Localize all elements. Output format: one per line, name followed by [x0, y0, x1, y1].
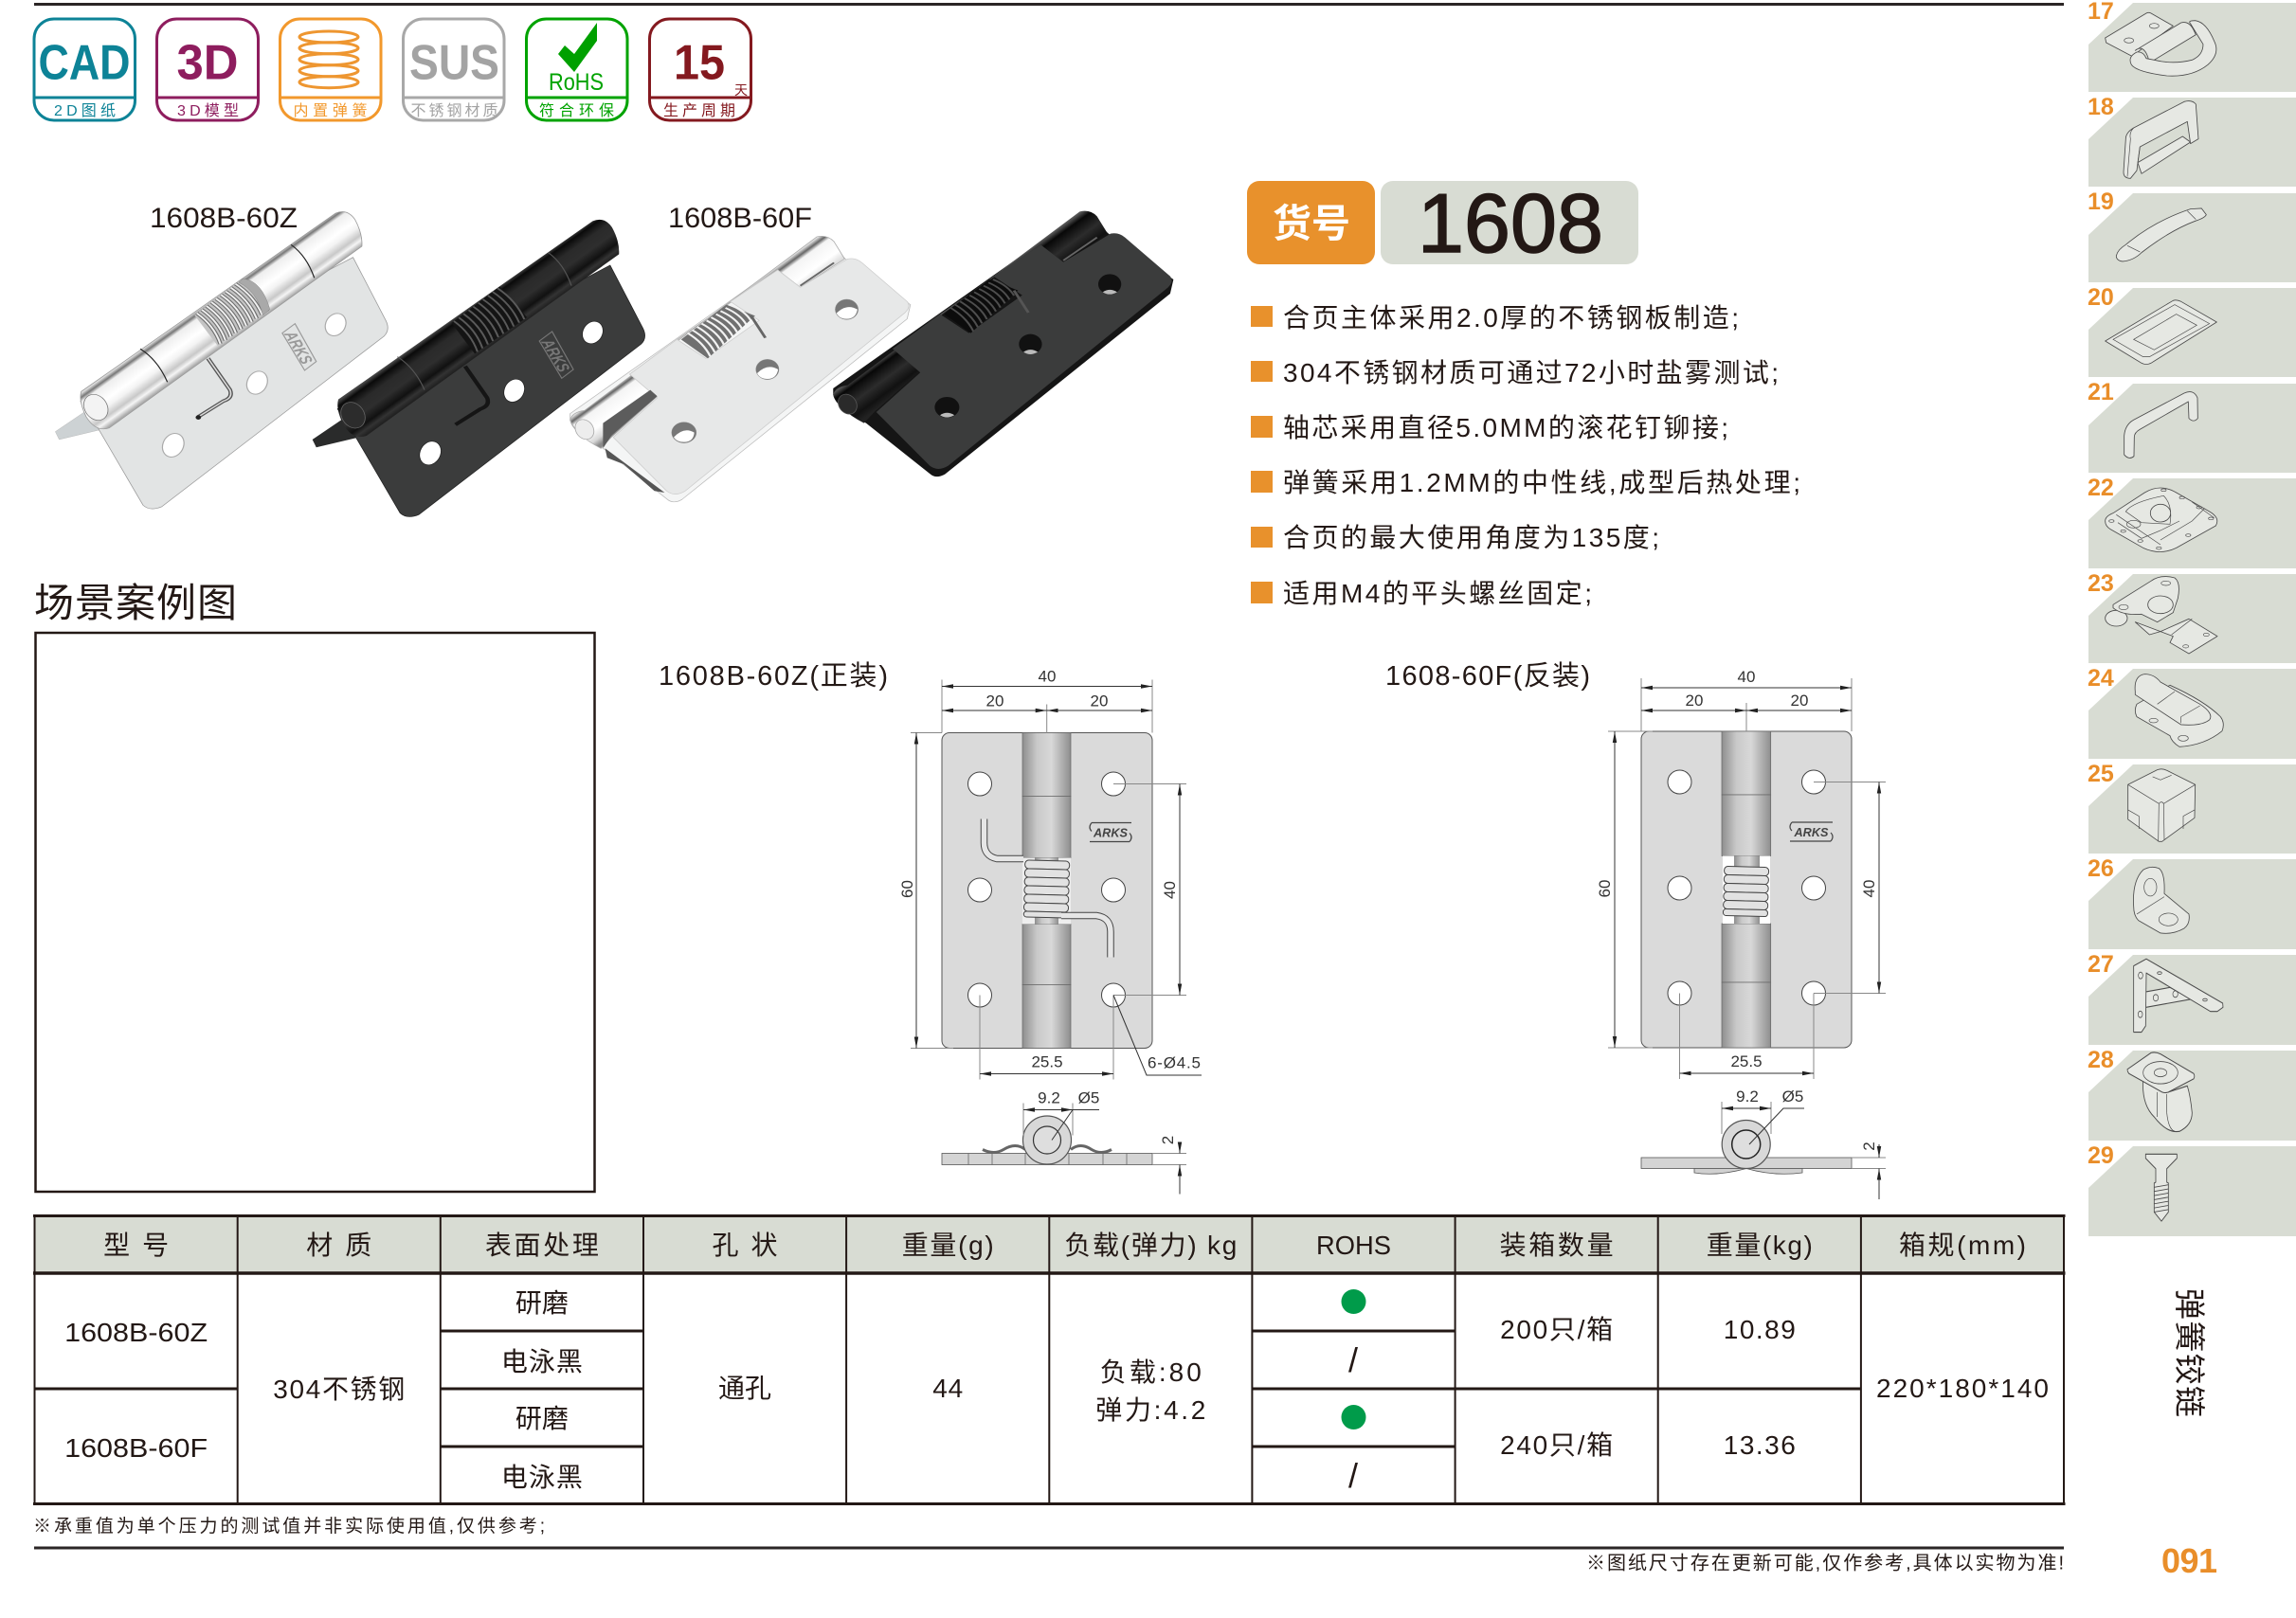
table header text: 型 号 — [103, 1231, 169, 1260]
table header text: 孔 状 — [713, 1231, 777, 1260]
feature 2: 304不锈钢材质可通过72小时盐雾测试; — [1283, 358, 1779, 387]
table body text: 电泳黑 — [501, 1463, 583, 1492]
table header text: 负载(弹力) kg — [1064, 1231, 1237, 1260]
badge: CAD: CAD — [38, 36, 131, 91]
table header text: 箱规(mm) — [1899, 1231, 2026, 1260]
product number tag: value: 1608 — [1418, 176, 1603, 270]
sidebar numbers: 28 — [2088, 1047, 2114, 1073]
table body text: 200只/箱 — [1500, 1315, 1613, 1344]
badge: 15 days — [650, 19, 750, 120]
table header text: 重量(kg) — [1707, 1231, 1813, 1260]
dimensions front view: 60 — [898, 880, 916, 898]
specification table — [33, 1214, 2066, 1505]
top rule — [34, 3, 2064, 6]
dimensions front view: 40 — [1039, 667, 1056, 686]
side view: Ø5 — [1782, 1088, 1803, 1106]
category label rotated: 弹簧铰链 — [2172, 1288, 2207, 1417]
product photo: silver hinge back — [570, 236, 911, 502]
dimensions front view: 25.5 — [1730, 1052, 1763, 1070]
page number: 091 — [2161, 1541, 2217, 1580]
logo on plate — [1790, 822, 1833, 841]
badge: 15 days: 生产周期 — [663, 102, 735, 119]
dimensions front view: 40 — [1161, 881, 1179, 899]
side view: 9.2 — [1736, 1088, 1759, 1106]
empty scene photo frame — [36, 633, 595, 1192]
badge: internal spring: 内置弹簧 — [294, 101, 368, 119]
icon 18: fold handle — [2124, 101, 2198, 178]
dimensions front view: 60 — [1596, 880, 1614, 897]
dimensions front view: 20 — [986, 692, 1003, 710]
table header background — [34, 1216, 2064, 1273]
sidebar numbers — [2088, 0, 2114, 1169]
badge: 15 days: 15 — [674, 36, 725, 91]
sidebar numbers: 26 — [2088, 855, 2114, 882]
ROHS marker — [1342, 1405, 1366, 1429]
side view — [942, 1089, 1186, 1194]
sidebar numbers: 20 — [2088, 284, 2114, 311]
sidebar product navigation — [2088, 0, 2296, 1236]
dimensions front view: 25.5 — [1031, 1053, 1063, 1070]
table body text: 研磨 — [515, 1404, 569, 1433]
footnote: load values: ※承重值为单个压力的测试值并非实际使用值,仅供参考; — [33, 1516, 545, 1537]
sidebar numbers: 27 — [2088, 951, 2114, 978]
feature 4: 弹簧采用1.2MM的中性线,成型后热处理; — [1283, 468, 1800, 497]
technical drawing: 1608B-60Z — [898, 667, 1202, 1194]
table header text: ROHS — [1316, 1231, 1391, 1260]
table grid — [33, 1214, 2066, 1505]
badge: stainless steel — [404, 19, 504, 120]
badge: 3D: 3D模型 — [177, 102, 239, 119]
model label 1608B-60Z: 1608B-60Z — [150, 203, 298, 234]
product photo: black hinge front: ARKS — [537, 336, 573, 375]
side view: 2 — [1159, 1136, 1177, 1144]
icons 22 to 26 — [2106, 488, 2223, 933]
table body text: 弹力:4.2 — [1095, 1395, 1205, 1425]
badge: CAD — [34, 19, 135, 120]
logo on plate — [1090, 822, 1131, 841]
badge: RoHS: RoHS — [549, 69, 604, 96]
table body text: 13.36 — [1724, 1430, 1796, 1460]
table body text: 304不锈钢 — [273, 1375, 405, 1404]
sidebar numbers: 21 — [2088, 379, 2114, 405]
icons 27 to 29 — [2127, 959, 2223, 1221]
dimensions front view: 6-Ø4.5 — [1148, 1053, 1201, 1072]
product photo: black hinge back — [833, 211, 1173, 476]
table header text — [103, 1231, 2026, 1260]
badge: 3D — [157, 19, 258, 120]
icon 25: box corner — [2128, 769, 2196, 841]
feature 1: 合页主体采用2.0厚的不锈钢板制造; — [1283, 303, 1739, 333]
icon 17: D ring — [2106, 12, 2216, 76]
dimensions front view: 20 — [1791, 692, 1808, 710]
sidebar numbers: 22 — [2088, 475, 2114, 501]
product number tag: orange: 货号 — [1273, 202, 1350, 245]
feature 3: 轴芯采用直径5.0MM的滚花钉铆接; — [1283, 413, 1728, 442]
dimensions front view: 20 — [1091, 692, 1108, 710]
dimensions front view: 40 — [1738, 668, 1755, 686]
badge: internal spring — [280, 19, 381, 120]
feature list — [1251, 303, 1800, 608]
icon 21: bar handle — [2124, 392, 2197, 458]
badge: 15 days: 天 — [734, 82, 748, 98]
side view: Ø5 — [1078, 1089, 1099, 1106]
bottom rule — [34, 1546, 2064, 1550]
drawing label 1608-60F: 1608-60F(反装) — [1385, 660, 1590, 692]
table body text: 1608B-60Z — [64, 1318, 208, 1347]
logo on plate: ARKS — [1794, 825, 1829, 839]
sidebar numbers: 25 — [2088, 761, 2114, 787]
side view — [1641, 1088, 1886, 1199]
icon 24: slide latch — [2135, 674, 2223, 746]
dimensions front view — [898, 667, 1202, 1080]
dimensions front view: 20 — [1686, 692, 1703, 710]
table body text — [64, 1288, 2049, 1495]
table body text: 220*180*140 — [1876, 1374, 2049, 1403]
heading: scene cases: 场景案例图 — [34, 581, 237, 625]
logo on plate: ARKS — [1093, 826, 1128, 839]
icons 17 to 21 — [2106, 12, 2216, 458]
badge: stainless steel: SUS — [409, 36, 499, 91]
icon 22: butterfly latch — [2106, 488, 2217, 551]
badge row — [34, 19, 750, 120]
product number tag: orange — [1247, 181, 1375, 264]
side view: 2 — [1860, 1142, 1878, 1151]
table header text: 表面处理 — [485, 1231, 599, 1260]
badge: RoHS: 符合环保 — [539, 102, 614, 119]
dimensions front view — [1596, 668, 1886, 1079]
side view: 9.2 — [1038, 1089, 1060, 1106]
table body text: 1608B-60F — [64, 1433, 208, 1463]
product photo: silver hinge front — [55, 211, 388, 509]
feature 5: 合页的最大使用角度为135度; — [1283, 523, 1659, 552]
table body text: / — [1348, 1456, 1358, 1495]
ROHS marker — [1342, 1289, 1366, 1314]
dimensions front view: 40 — [1860, 880, 1878, 897]
icon 26: angle bracket — [2133, 867, 2189, 933]
sidebar numbers: 23 — [2088, 570, 2114, 597]
sidebar panels — [2088, 3, 2296, 1236]
table body text: 44 — [932, 1374, 963, 1403]
badge: RoHS — [527, 19, 627, 120]
table body text: 240只/箱 — [1500, 1430, 1613, 1460]
icon 20: recessed handle — [2106, 300, 2216, 365]
drawing label 1608B-60Z: 1608B-60Z(正装) — [659, 660, 888, 692]
sidebar numbers: 24 — [2088, 665, 2114, 692]
sidebar numbers: 18 — [2088, 94, 2114, 120]
icon 29: tapping screw — [2145, 1154, 2177, 1221]
sidebar numbers: 19 — [2088, 189, 2114, 215]
footnote: drawing dimensions: ※图纸尺寸存在更新可能,仅作参考,具体以实物为准! — [1586, 1552, 2064, 1574]
table header text: 装箱数量 — [1500, 1231, 1614, 1260]
model label 1608B-60F: 1608B-60F — [668, 203, 812, 234]
table body text: 电泳黑 — [501, 1347, 583, 1376]
icon 23: draw latch — [2106, 577, 2217, 654]
product photo: silver hinge front: ARKS — [280, 328, 316, 367]
badge: CAD: 2D图纸 — [54, 102, 116, 119]
icon 27: shelf bracket — [2134, 959, 2223, 1033]
badge: stainless steel: 不锈钢材质 — [411, 102, 498, 119]
badge: 3D: 3D — [176, 36, 239, 91]
product photo: black hinge front — [313, 220, 645, 516]
feature 6: 适用M4的平头螺丝固定; — [1283, 579, 1592, 608]
sidebar numbers: 29 — [2088, 1142, 2114, 1169]
table body text: 负载:80 — [1100, 1357, 1202, 1387]
table body text: 10.89 — [1724, 1315, 1796, 1344]
table body text: 研磨 — [515, 1288, 569, 1318]
plate front view — [1641, 731, 1852, 1048]
table header text: 材 质 — [306, 1231, 371, 1260]
icon 19: strap handle — [2116, 208, 2206, 261]
technical drawing: 1608-60F — [1596, 668, 1886, 1199]
table body text: 通孔 — [718, 1374, 771, 1403]
table header text: 重量(g) — [902, 1231, 994, 1260]
plate front view — [942, 733, 1152, 1048]
icon 28: caster wheel — [2127, 1052, 2195, 1132]
table body text: / — [1348, 1340, 1358, 1379]
